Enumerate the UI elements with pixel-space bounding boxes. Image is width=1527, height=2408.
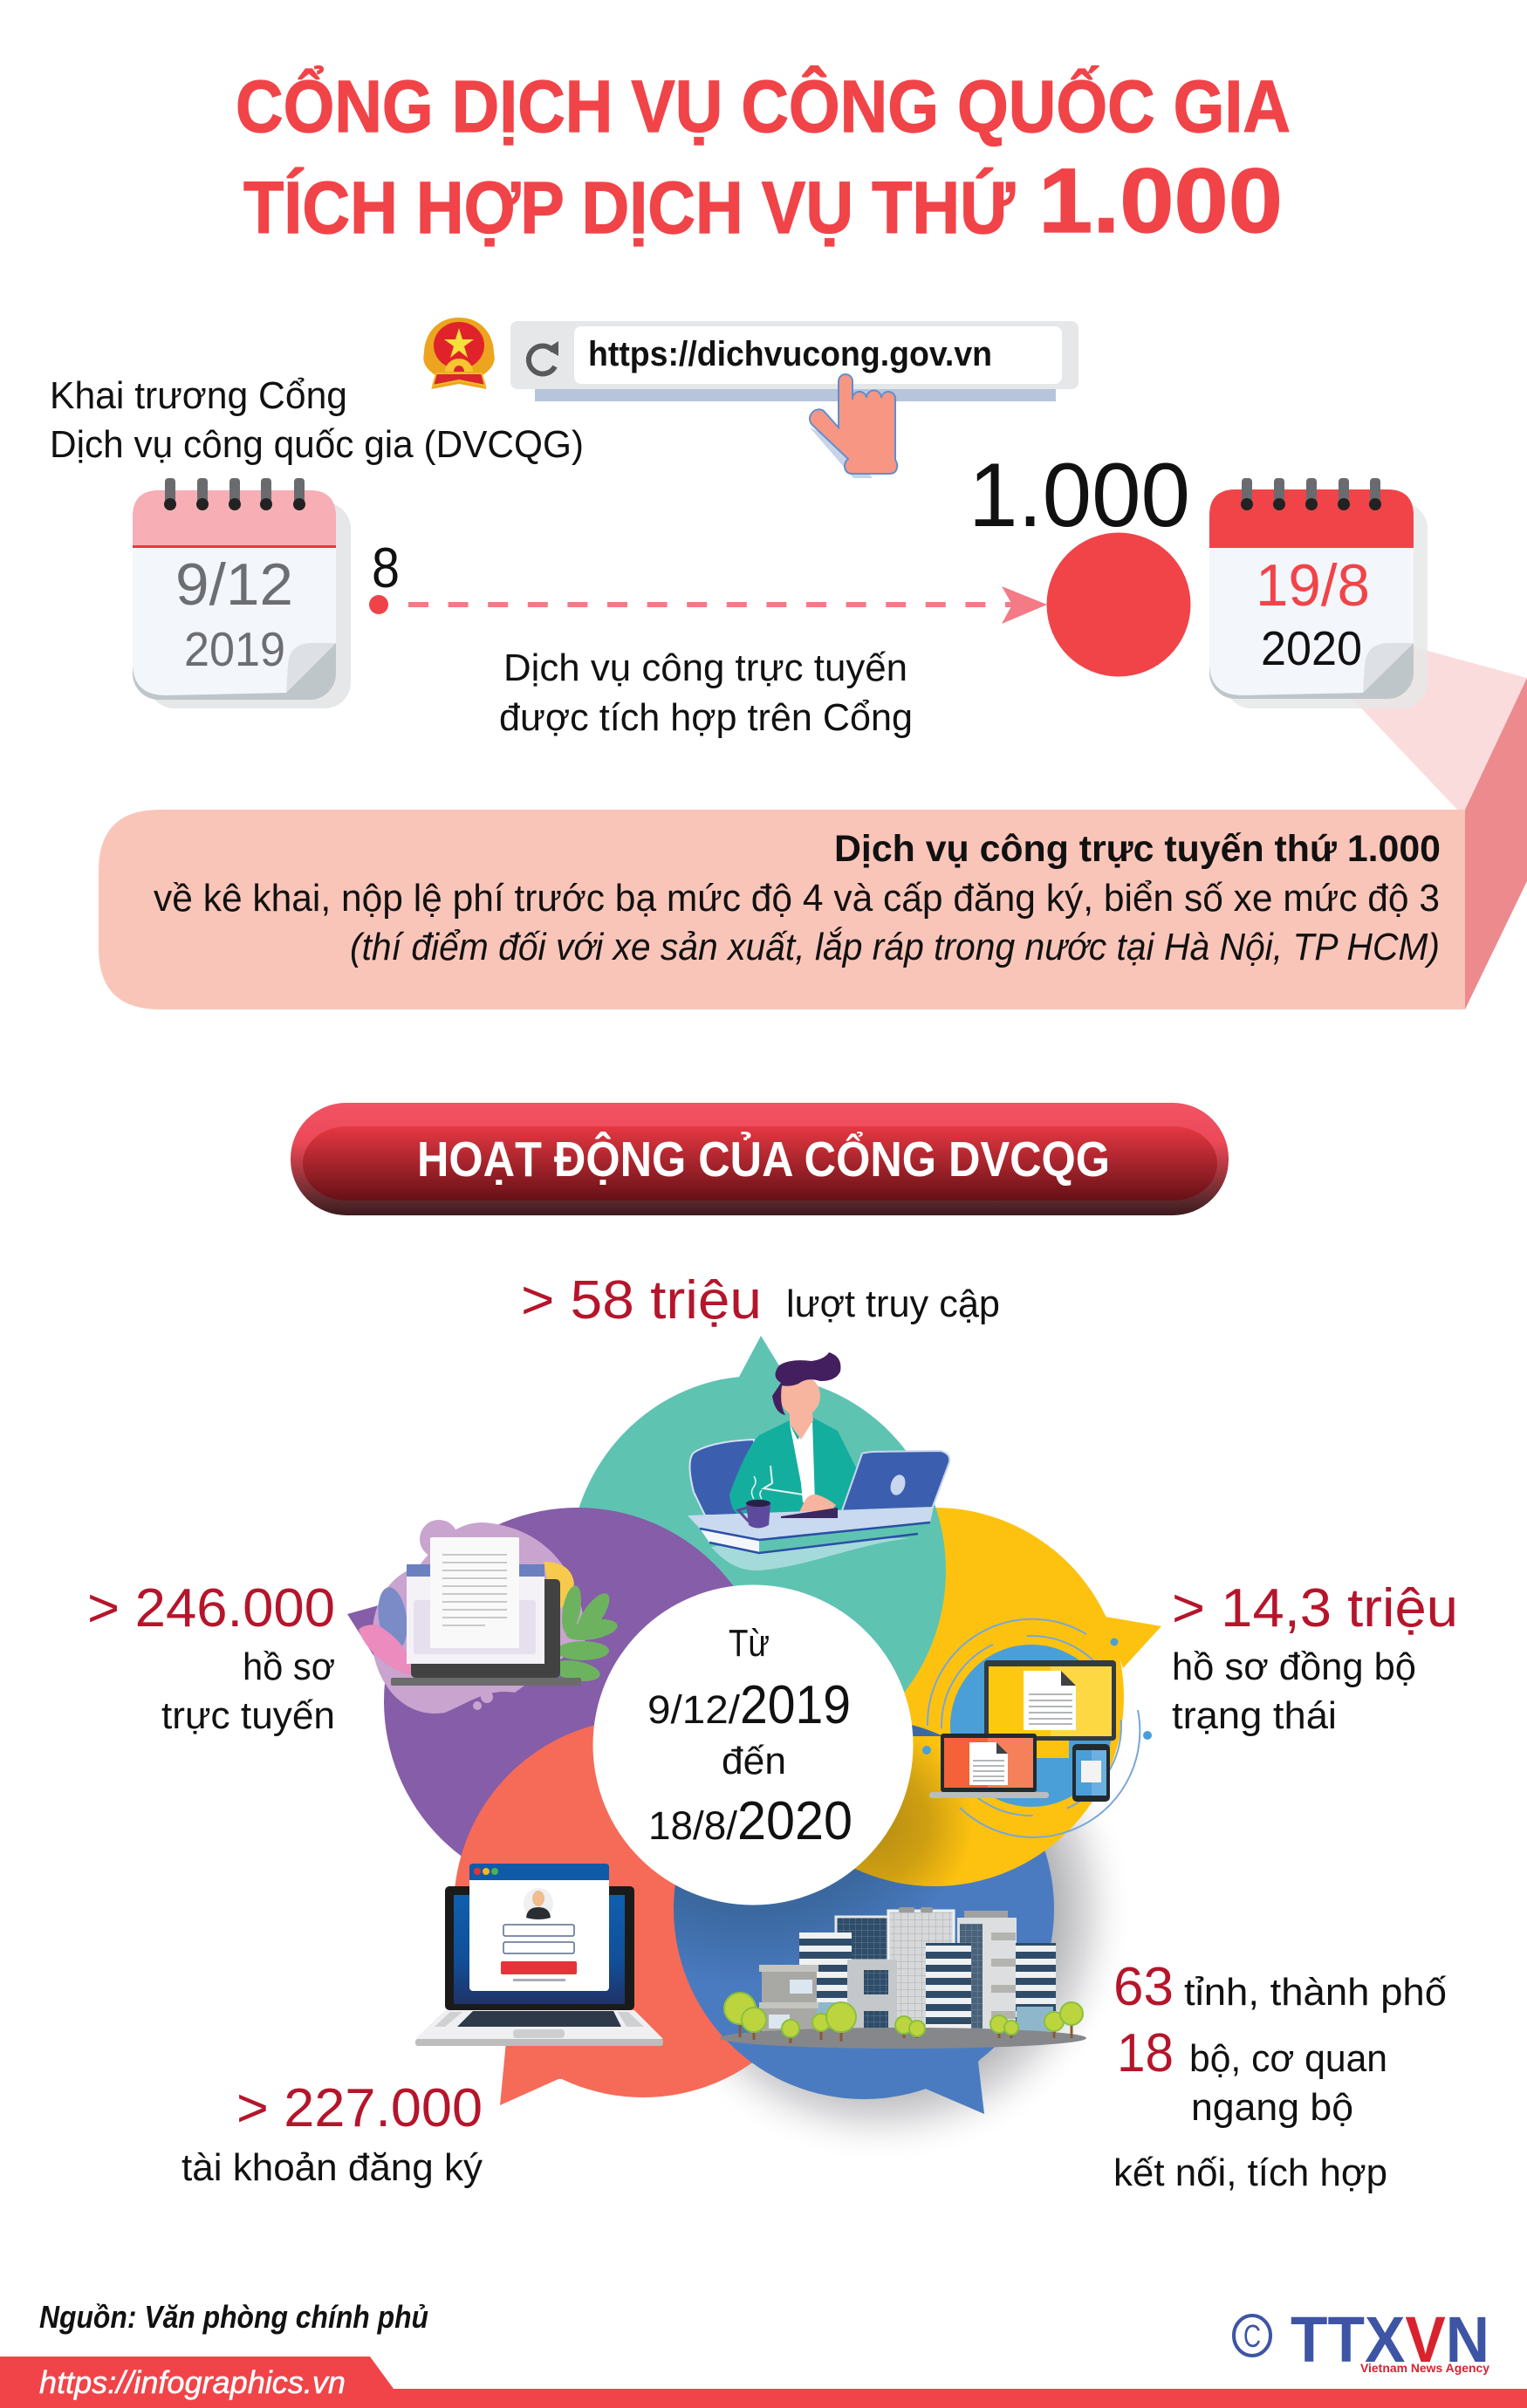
illustration: login laptop — [415, 1864, 663, 2046]
title: TÍCH HỢP DỊCH VỤ THỨ — [243, 167, 1015, 249]
stat: 227000 accounts: > 227.000 — [236, 2078, 483, 2138]
illustration: documents on laptop — [359, 1520, 619, 1714]
icon: calendar 9/12/2019: 2019 — [184, 622, 285, 676]
heading: activity badge: HOẠT ĐỘNG CỦA CỔNG DVCQG — [417, 1131, 1110, 1187]
stat: 246000 online dossiers: hồ sơ — [243, 1645, 335, 1688]
petal: yellow overlap with shading — [855, 1736, 1120, 1886]
circle: 1000 marker — [1047, 532, 1190, 677]
stat: 63 provinces and 18 ministries — [1113, 1957, 1447, 2194]
panel: 1000th service: Dịch vụ công trực tuyến thứ 1.000 — [834, 828, 1441, 870]
petal: yellow — [745, 1508, 1161, 1886]
text: online services caption: được tích hợp trên Cổng — [499, 696, 913, 739]
panel: 1000th service: về kê khai, nộp lệ phí trước bạ mức độ 4 và cấp đăng ký, biển số xe mức độ 3 — [154, 877, 1440, 920]
stat: 63 provinces and 18 ministries: 18 — [1117, 2023, 1174, 2083]
petal: blue — [674, 1719, 1054, 2114]
arrow: dashed timeline — [408, 586, 1047, 624]
title — [236, 65, 1291, 252]
icon: national emblem — [423, 318, 495, 389]
stat: 58 million visits: > 58 triệu — [521, 1270, 762, 1331]
panel: 1000th service — [99, 678, 1527, 1009]
center circle: period — [593, 1584, 913, 1905]
text: online services caption: Dịch vụ công trực tuyến — [503, 646, 907, 689]
source text: Nguồn: Văn phòng chính phủ — [39, 2299, 428, 2335]
stat: 58 million visits — [521, 1270, 1000, 1331]
stat: 14.3 million status sync: trạng thái — [1172, 1694, 1337, 1737]
illustration: woman with laptop — [688, 1352, 949, 1570]
icon: calendar 9/12/2019: 9/12 — [175, 551, 293, 618]
illustration: city buildings — [720, 1907, 1086, 2049]
text: online services caption — [499, 646, 913, 739]
center circle: period: Từ — [729, 1622, 770, 1665]
logo: TTXVN: Vietnam News Agency — [1360, 2361, 1489, 2375]
center circle: period: đến — [722, 1740, 786, 1782]
petal: purple — [347, 1508, 771, 1895]
stat: 246000 online dossiers: > 246.000 — [87, 1578, 335, 1638]
number: 1.000: 1.000 — [969, 445, 1190, 546]
heading: activity badge — [291, 1103, 1229, 1215]
shadow: behind blue petal — [628, 1658, 1134, 2164]
stat: 63 provinces and 18 ministries: kết nối, tích hợp — [1113, 2151, 1387, 2194]
icon: calendar 9/12/2019 — [133, 478, 351, 708]
logo: TTXVN: C — [1243, 2318, 1261, 2354]
center circle: period: 2019 — [740, 1675, 851, 1735]
text: launch label: Khai trương Cổng — [50, 374, 347, 417]
center circle: period: 9/12/ — [647, 1687, 741, 1732]
footer band — [0, 2357, 1527, 2408]
stat: 58 million visits: lượt truy cập — [786, 1283, 1000, 1325]
timeline dot — [369, 595, 388, 614]
icon: pointing hand — [810, 374, 897, 478]
icon: calendar 19/8/2020 — [1209, 478, 1428, 708]
text: launch label: Dịch vụ công quốc gia (DVCQG) — [50, 423, 584, 466]
title: 1.000 — [1038, 150, 1283, 252]
title: CỔNG DỊCH VỤ CÔNG QUỐC GIA — [236, 65, 1291, 147]
icon: calendar 19/8/2020: 2020 — [1261, 621, 1362, 675]
footer band: https://infographics.vn — [39, 2364, 346, 2400]
stat: 14.3 million status sync — [1172, 1578, 1458, 1737]
center circle: period: 2020 — [737, 1791, 853, 1851]
stat: 246000 online dossiers — [87, 1578, 335, 1737]
stat: 63 provinces and 18 ministries: ngang bộ — [1191, 2086, 1353, 2129]
petal: coral — [454, 1719, 832, 2105]
url bar: https://dichvucong.gov.vn — [588, 335, 992, 373]
stat: 246000 online dossiers: trực tuyến — [161, 1694, 335, 1737]
logo: TTXVN: TTXVN — [1291, 2303, 1489, 2376]
panel: 1000th service: (thí điểm đối với xe sản xuất, lắp ráp trong nước tại Hà Nội, TP HCM) — [350, 926, 1440, 968]
url bar — [510, 321, 1078, 401]
stat: 227000 accounts — [181, 2078, 483, 2189]
icon: refresh — [529, 341, 558, 373]
callout: zoom beam — [1352, 642, 1527, 810]
text: launch label — [50, 374, 584, 466]
petal: teal — [569, 1336, 946, 1765]
stat: 63 provinces and 18 ministries: bộ, cơ quan — [1189, 2037, 1387, 2080]
stat: 63 provinces and 18 ministries: tỉnh, thành phố — [1184, 1971, 1447, 2014]
center circle: period: 18/8/ — [648, 1803, 737, 1848]
stat: 14.3 million status sync: > 14,3 triệu — [1172, 1578, 1458, 1638]
number: 8 services: 8 — [372, 536, 400, 599]
stat: 63 provinces and 18 ministries: 63 — [1113, 1957, 1174, 2017]
icon: calendar 19/8/2020: 19/8 — [1256, 552, 1370, 619]
stat: 14.3 million status sync: hồ sơ đồng bộ — [1172, 1645, 1416, 1688]
illustration: synced devices — [922, 1619, 1152, 1837]
stat: 227000 accounts: tài khoản đăng ký — [181, 2146, 483, 2189]
